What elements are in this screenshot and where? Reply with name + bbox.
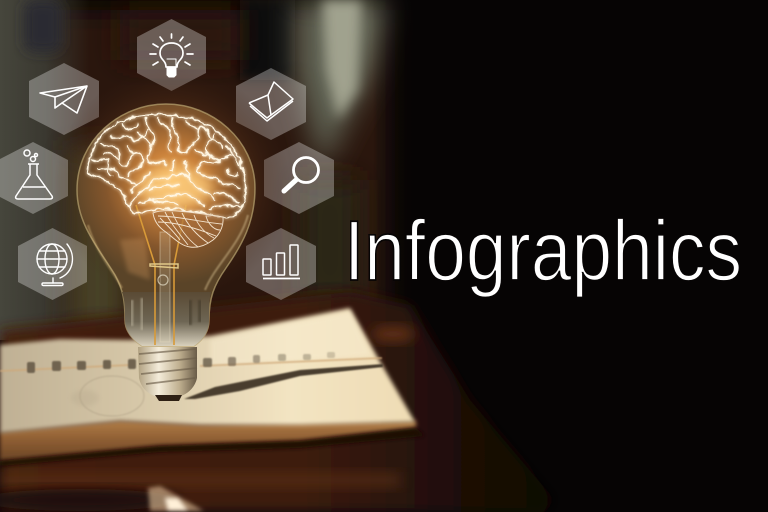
- spiral rings: [27, 352, 335, 373]
- icon: bar chart: [263, 245, 300, 278]
- table reflection of lamp: [148, 486, 204, 511]
- translucent hexagons: [0, 19, 334, 300]
- glowing brain: [87, 114, 246, 217]
- bulb shadow: [184, 364, 383, 399]
- icon: light bulb: [150, 34, 193, 77]
- open notebook: [0, 308, 425, 466]
- icon: paper plane: [40, 86, 87, 113]
- glass lower neck: [122, 292, 211, 346]
- light bulb: [54, 67, 290, 401]
- icon: globe: [37, 244, 72, 286]
- screw base: [138, 347, 197, 401]
- icon: open book: [249, 82, 293, 121]
- warm glow: [54, 67, 290, 303]
- open pages: [0, 308, 415, 433]
- brain core glow: [137, 168, 213, 208]
- icon: magnifying glass: [284, 158, 318, 191]
- icon: flask: [16, 150, 52, 199]
- page edge: [0, 421, 416, 461]
- wooden table: [0, 292, 555, 512]
- filament stem: [136, 205, 186, 345]
- binding line: [0, 358, 382, 371]
- glass envelope: [77, 104, 255, 346]
- cerebellum: [153, 211, 223, 247]
